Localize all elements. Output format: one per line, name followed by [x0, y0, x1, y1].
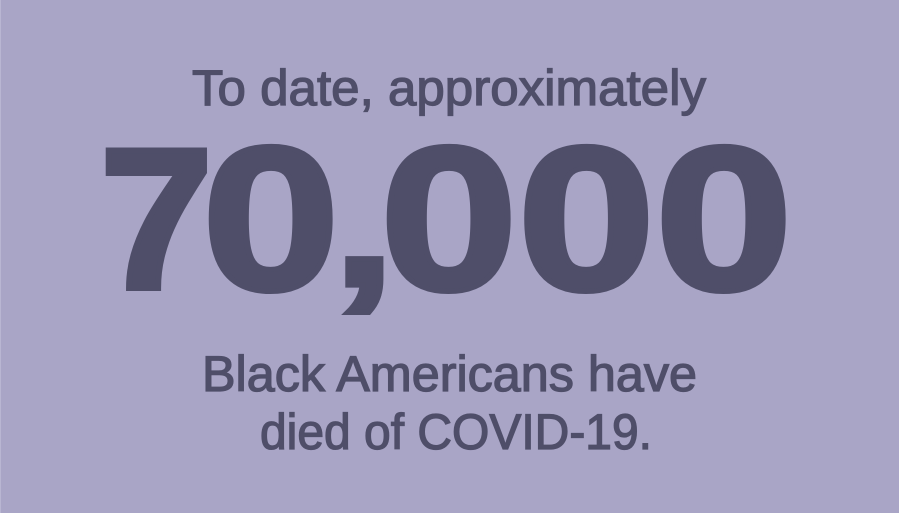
intro text: To date, approximately [192, 60, 706, 116]
big number: 70,000: 0 [380, 105, 518, 334]
big number: 70,000: 0 [202, 105, 340, 334]
big number: 70,000: 0 [655, 105, 793, 334]
big number: 70,000: 0 [518, 105, 655, 334]
closing text [202, 346, 697, 460]
big number: 70,000 [100, 105, 793, 334]
closing text: died of COVID-19. [260, 404, 652, 460]
big number: 70,000: , [333, 125, 395, 323]
closing text: Black Americans have [202, 346, 697, 402]
big number: 70,000: 7 [100, 107, 213, 331]
